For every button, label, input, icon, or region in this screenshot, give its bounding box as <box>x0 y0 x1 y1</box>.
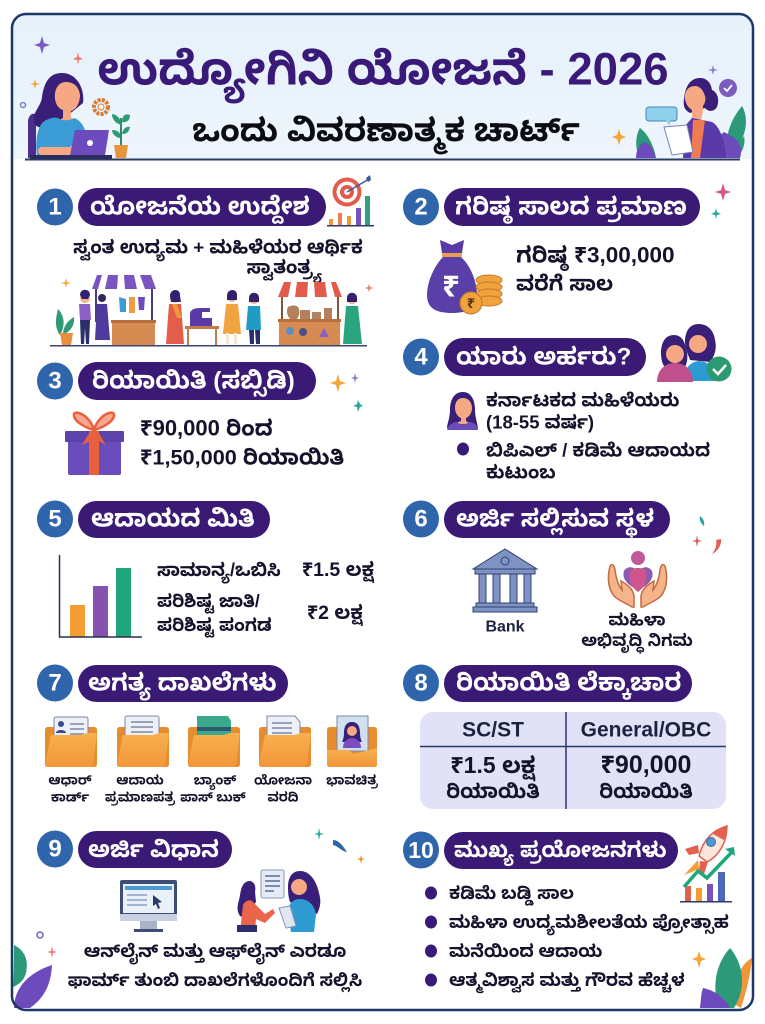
figures at sewing table <box>166 290 261 345</box>
document labels: ಆದಾಯ <box>116 772 164 788</box>
icon: sparkles left <box>20 36 83 108</box>
icon: sparkles <box>330 373 363 412</box>
body text 9 <box>68 941 362 993</box>
number badge 7 <box>37 664 73 702</box>
heading pill 4 <box>444 338 646 376</box>
heading pill 3: ರಿಯಾಯಿತಿ (ಸಬ್ಸಿಡಿ) <box>92 368 295 398</box>
number badge 5: 5 <box>48 506 62 532</box>
body text 4: (18-55 ವರ್ಷ) <box>486 412 594 432</box>
document labels: ಪಾಸ್ ಬುಕ್ <box>180 790 247 804</box>
income table text: ₹1.5 ಲಕ್ಷ <box>302 559 375 584</box>
heading pill 5: ಆದಾಯದ ಮಿತಿ <box>91 506 255 532</box>
number badge 5 <box>37 500 73 538</box>
title: ಉದ್ಯೋಗಿನಿ ಯೋಜನೆ - 2026 <box>97 44 669 104</box>
benefits list <box>425 883 729 994</box>
body text 2: ವರೆಗೆ ಸಾಲ <box>516 272 613 296</box>
stall: clothes <box>92 275 156 345</box>
number badge 6 <box>403 500 439 538</box>
figure at pottery stall <box>343 293 362 344</box>
icon: sparkles <box>711 183 731 219</box>
icon: gear <box>94 100 108 114</box>
income table text <box>157 559 375 638</box>
icon: small plant <box>56 309 74 345</box>
icon: computer monitor <box>120 880 177 932</box>
body text 9: ಆನ್‌ಲೈನ್ ಮತ್ತು ಆಫ್‌ಲೈನ್ ಎರಡೂ <box>84 941 346 964</box>
icon: money bag and coins: ₹ <box>467 295 475 311</box>
icon: confetti <box>314 828 365 864</box>
body text 1 <box>73 236 363 284</box>
table: subsidy by category <box>420 712 726 809</box>
table: subsidy by category: SC/ST <box>462 718 524 742</box>
decoration: lower right leaves <box>692 948 752 1008</box>
label: women development corporation <box>581 610 693 654</box>
table: subsidy by category: ₹90,000 <box>601 751 691 779</box>
table: subsidy by category: ರಿಯಾಯಿತಿ <box>446 781 540 803</box>
body text 2 <box>516 242 675 296</box>
number badge 2 <box>403 188 439 226</box>
section 2: maximum loan <box>403 183 731 314</box>
number badge 8: 8 <box>414 670 428 696</box>
heading pill 10: ಮುಖ್ಯ ಪ್ರಯೋಜನಗಳು <box>454 838 667 866</box>
heading pill 7: ಅಗತ್ಯ ದಾಖಲೆಗಳು <box>88 670 277 702</box>
heading pill 4: ಯಾರು ಅರ್ಹರು? <box>456 344 631 370</box>
section 8: subsidy calculation <box>403 664 726 809</box>
subtitle: ಒಂದು ವಿವರಣಾತ್ಮಕ ಚಾರ್ಟ್ <box>192 112 580 155</box>
income table text: ಪರಿಶಿಷ್ಟ ಪಂಗಡ <box>157 615 272 638</box>
icon: potted plant <box>112 114 130 158</box>
number badge 2: 2 <box>414 194 428 220</box>
stall: pottery <box>278 282 342 345</box>
document labels: ವರದಿ <box>268 790 299 804</box>
income table text: ಸಾಮಾನ್ಯ/ಒಬಿಸಿ <box>157 560 281 584</box>
document labels: ಪ್ರಮಾಣಪತ್ರ <box>105 790 175 806</box>
illustration: women at market stalls <box>50 275 373 346</box>
bar chart <box>60 555 142 637</box>
icon: target and bars <box>327 175 374 226</box>
icon: folder aadhaar <box>45 717 97 767</box>
icon: folder photograph <box>327 716 377 767</box>
icon: folder bank passbook <box>188 716 240 767</box>
heading pill 5 <box>78 501 270 538</box>
document labels: ಆಧಾರ್ <box>48 772 92 788</box>
icon: woman with clipboard <box>612 65 746 158</box>
benefits list: ಮಹಿಳಾ ಉದ್ಯಮಶೀಲತೆಯ ಪ್ರೋತ್ಸಾಹ <box>449 912 729 936</box>
number badge 8 <box>403 664 439 702</box>
body text 4: ಕುಟುಂಬ <box>486 462 556 482</box>
heading pill 8: ರಿಯಾಯಿತಿ ಲೆಕ್ಕಾಚಾರ <box>456 670 681 700</box>
decoration: lower left leaves <box>13 932 57 1008</box>
body text 4: ಕರ್ನಾಟಕದ ಮಹಿಳೆಯರು <box>486 390 680 410</box>
icon: gift box <box>65 413 124 475</box>
icon: two women with document <box>237 870 320 932</box>
heading pill 7 <box>78 665 288 702</box>
section 5: income limit <box>37 500 375 638</box>
icon: confetti <box>692 516 721 554</box>
document labels: ಬ್ಯಾಂಕ್ <box>194 772 237 790</box>
heading pill 1: ಯೋಜನೆಯ ಉದ್ದೇಶ <box>90 194 310 224</box>
document labels: ಯೋಜನಾ <box>254 772 312 788</box>
figures at clothes stall <box>79 290 110 344</box>
section 10: key benefits <box>403 826 752 1008</box>
number badge 1 <box>37 188 73 226</box>
icon: bank <box>473 549 537 612</box>
heading pill 6 <box>444 501 670 538</box>
income table text: ಪರಿಶಿಷ್ಟ ಜಾತಿ/ <box>157 591 260 614</box>
number badge 10: 10 <box>408 837 434 863</box>
icon: woman portrait <box>447 392 478 430</box>
section 9: application procedure <box>13 828 365 1008</box>
icon: money bag and coins: ₹ <box>442 270 460 304</box>
body text 1: ಸ್ವಂತ ಉದ್ಯಮ + ಮಹಿಳೆಯರ ಆರ್ಥಿಕ <box>73 236 363 262</box>
section 7: documents <box>37 664 378 806</box>
icon: two women with check <box>657 324 732 382</box>
heading pill 6: ಅರ್ಜಿ ಸಲ್ಲಿಸುವ ಸ್ಥಳ <box>456 506 654 538</box>
section 3: subsidy <box>37 362 363 475</box>
icon: woman at laptop <box>28 73 112 159</box>
heading pill 9: ಅರ್ಜಿ ವಿಧಾನ <box>88 836 219 862</box>
icon: folder project report <box>259 716 311 767</box>
number badge 3: 3 <box>48 368 62 394</box>
table: subsidy by category: ರಿಯಾಯಿತಿ <box>599 781 693 803</box>
body text 1: ಸ್ವಾತಂತ್ರ್ಯ <box>247 256 323 284</box>
number badge 4 <box>403 338 439 376</box>
icon: rocket and growth chart <box>680 826 735 902</box>
income table text: ₹2 ಲಕ್ಷ <box>307 602 363 627</box>
icon: hands holding people <box>608 551 667 607</box>
icon: folder income certificate <box>117 716 169 767</box>
section 1: objective <box>37 175 374 346</box>
body text 4 <box>457 390 710 482</box>
number badge 1: 1 <box>48 194 62 220</box>
label: women development corporation: ಅಭಿವೃದ್ಧಿ ನಿಗಮ <box>581 632 693 654</box>
number badge 9 <box>37 830 73 868</box>
number badge 7: 7 <box>48 670 62 696</box>
label: bank: Bank <box>485 618 525 636</box>
number badge 4: 4 <box>414 344 428 370</box>
body text 2: ಗರಿಷ್ಠ ₹3,00,000 <box>516 242 675 272</box>
number badge 6: 6 <box>414 506 428 532</box>
heading pill 3 <box>78 362 316 400</box>
heading pill 9 <box>78 831 232 868</box>
label: women development corporation: ಮಹಿಳಾ <box>608 610 666 630</box>
icon: money bag and coins <box>427 240 502 314</box>
benefits list: ಆತ್ಮವಿಶ್ವಾಸ ಮತ್ತು ಗೌರವ ಹೆಚ್ಚಳ <box>449 970 685 994</box>
heading pill 2 <box>444 188 700 226</box>
benefits list: ಮನೆಯಿಂದ ಆದಾಯ <box>449 941 602 961</box>
icon: sparkles <box>61 278 373 292</box>
heading pill 10 <box>444 832 678 869</box>
body text 3 <box>140 416 344 470</box>
number badge 9: 9 <box>48 836 62 862</box>
document labels: ಭಾವಚಿತ್ರ <box>326 772 378 790</box>
body text 4: ಬಿಪಿಎಲ್ / ಕಡಿಮೆ ಆದಾಯದ <box>486 440 710 460</box>
table: subsidy by category: General/OBC <box>581 718 711 742</box>
body text 9: ಫಾರ್ಮ್ ತುಂಬಿ ದಾಖಲೆಗಳೊಂದಿಗೆ ಸಲ್ಲಿಸಿ <box>68 970 362 993</box>
section 4: eligibility <box>403 324 732 482</box>
document labels: ಕಾರ್ಡ್ <box>51 790 89 804</box>
heading pill 2: ಗರಿಷ್ಠ ಸಾಲದ ಪ್ರಮಾಣ <box>455 194 687 224</box>
number badge 3 <box>37 362 73 400</box>
section 6: where to apply <box>403 500 721 654</box>
body text 3: ₹90,000 ರಿಂದ <box>140 416 273 440</box>
heading pill 1 <box>78 188 326 226</box>
heading pill 8 <box>444 665 692 702</box>
table: subsidy by category: ₹1.5 ಲಕ್ಷ <box>451 752 536 782</box>
document labels <box>48 772 378 806</box>
number badge 10 <box>403 832 439 868</box>
body text 3: ₹1,50,000 ರಿಯಾಯಿತಿ <box>140 444 344 470</box>
benefits list: ಕಡಿಮೆ ಬಡ್ಡಿ ಸಾಲ <box>449 883 574 906</box>
